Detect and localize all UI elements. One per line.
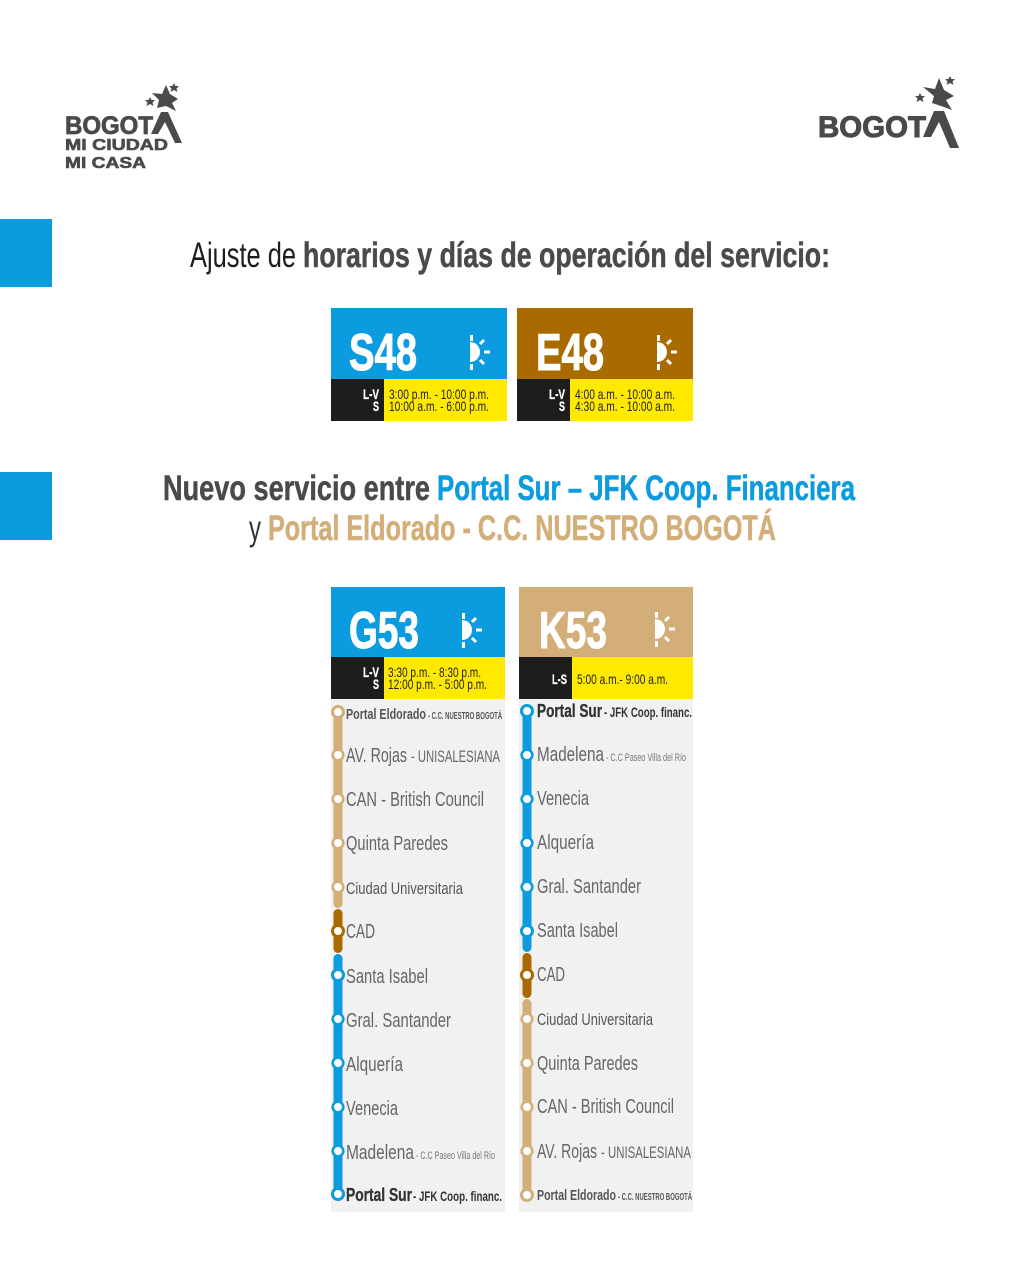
- section marker 1: [0, 219, 52, 287]
- heading: nuevo servicio: y: [249, 509, 261, 548]
- route list: K53: Portal Sur: [537, 701, 602, 721]
- card: K53: K53: [539, 602, 607, 660]
- route line: tan segment: [522, 999, 532, 1195]
- route list: G53: Quinta Paredes: [346, 833, 448, 855]
- route list: K53: - UNISALESIANA: [601, 1143, 691, 1162]
- route list: G53: Ciudad Universitaria: [346, 879, 463, 898]
- route list: G53: CAD: [346, 921, 375, 943]
- route list: G53: - UNISALESIANA: [411, 747, 500, 766]
- route list: G53: Madelena: [346, 1142, 415, 1164]
- logo: Bogotá mi ciudad mi casa: MI CASA: [65, 155, 147, 172]
- card: K53: L-S: [552, 671, 567, 687]
- route list: K53: Ciudad Universitaria: [537, 1010, 653, 1029]
- heading: ajuste de horarios: [190, 236, 830, 275]
- route list: G53: Gral. Santander: [346, 1010, 451, 1032]
- card: S48: L-V: [363, 386, 379, 402]
- route list: G53: Portal Eldorado: [346, 706, 426, 723]
- card: S48: 10:00 a.m. - 6:00 p.m.: [389, 398, 489, 414]
- route list: G53: AV. Rojas: [346, 745, 407, 767]
- route list: K53: AV. Rojas: [537, 1141, 597, 1163]
- heading: nuevo servicio: Nuevo servicio entre: [163, 469, 430, 508]
- route list: K53: Gral. Santander: [537, 876, 641, 898]
- route line: tan segment: [334, 705, 342, 908]
- route line: brown segment: [522, 953, 532, 998]
- card: K53: [519, 587, 693, 699]
- route list: K53: - C.C Paseo Villa del Río: [606, 752, 686, 764]
- card: E48: L-V: [549, 386, 565, 402]
- heading: nuevo servicio: [163, 469, 855, 548]
- card: G53: G53: [349, 602, 419, 660]
- card: S48: 3:00 p.m. - 10:00 p.m.: [389, 386, 489, 402]
- card: E48: 4:00 a.m. - 10:00 a.m.: [575, 386, 675, 402]
- card: E48: S: [559, 398, 565, 414]
- route list: G53: Santa Isabel: [346, 966, 428, 988]
- icon: sun: [657, 335, 677, 370]
- card: S48: S48: [349, 324, 417, 382]
- card: G53: [331, 587, 505, 699]
- route list: K53: - C.C. NUESTRO BOGOTÁ: [618, 1190, 692, 1203]
- heading: ajuste de horarios: Ajuste de: [190, 236, 296, 275]
- route line: blue segment: [522, 705, 532, 952]
- icon: sun: [470, 335, 490, 370]
- route line: blue segment: [334, 954, 342, 1194]
- route list: K53: [519, 699, 693, 1212]
- card: G53: S: [373, 676, 379, 692]
- route list: G53: Portal Sur: [346, 1185, 412, 1205]
- icon: sun: [462, 613, 482, 648]
- card: E48: [517, 308, 693, 421]
- card: S48: S: [373, 398, 379, 414]
- card: E48: E48: [536, 324, 604, 382]
- route list: K53: CAD: [537, 964, 565, 986]
- card: S48: [331, 308, 507, 421]
- route line: brown segment: [334, 909, 342, 953]
- heading: nuevo servicio: Portal Eldorado - C.C. NUESTRO BOGOTÁ: [268, 508, 776, 548]
- route list: K53: Santa Isabel: [537, 920, 618, 942]
- route list: K53: Alquería: [537, 832, 595, 854]
- card: G53: L-V: [363, 664, 379, 680]
- route list: G53: - JFK Coop. financ.: [413, 1188, 502, 1204]
- route list: K53: Madelena: [537, 744, 605, 766]
- route list: G53: CAN - British Council: [346, 789, 484, 811]
- route list: K53: CAN - British Council: [537, 1096, 674, 1118]
- logo: Bogotá: BOGOT: [818, 111, 926, 144]
- icon: sun: [655, 612, 675, 647]
- route list: G53: [331, 699, 505, 1212]
- card: K53: 5:00 a.m.- 9:00 a.m.: [577, 671, 668, 687]
- section marker 2: [0, 472, 52, 540]
- route list: K53: Portal Eldorado: [537, 1187, 616, 1204]
- heading: ajuste de horarios: horarios y días de operación del servicio:: [303, 236, 830, 275]
- route list: G53: Venecia: [346, 1098, 399, 1120]
- route list: K53: Venecia: [537, 788, 590, 810]
- card: E48: 4:30 a.m. - 10:00 a.m.: [575, 398, 675, 414]
- logo: Bogotá mi ciudad mi casa: MI CIUDAD: [65, 137, 168, 154]
- logo: Bogotá: [818, 76, 959, 148]
- heading: nuevo servicio: Portal Sur – JFK Coop. Financiera: [437, 469, 855, 508]
- logo: Bogotá mi ciudad mi casa: [65, 83, 182, 172]
- route list: G53: Alquería: [346, 1054, 404, 1076]
- card: G53: 3:30 p.m. - 8:30 p.m.: [388, 664, 481, 680]
- route list: K53: - JFK Coop. financ.: [604, 704, 692, 720]
- route list: K53: Quinta Paredes: [537, 1053, 638, 1075]
- card: G53: 12:00 p.m. - 5:00 p.m.: [388, 676, 487, 692]
- route list: G53: - C.C Paseo Villa del Río: [416, 1150, 495, 1162]
- route list: G53: - C.C. NUESTRO BOGOTÁ: [428, 709, 502, 722]
- logo: Bogotá mi ciudad mi casa: BOGOT: [65, 112, 153, 140]
